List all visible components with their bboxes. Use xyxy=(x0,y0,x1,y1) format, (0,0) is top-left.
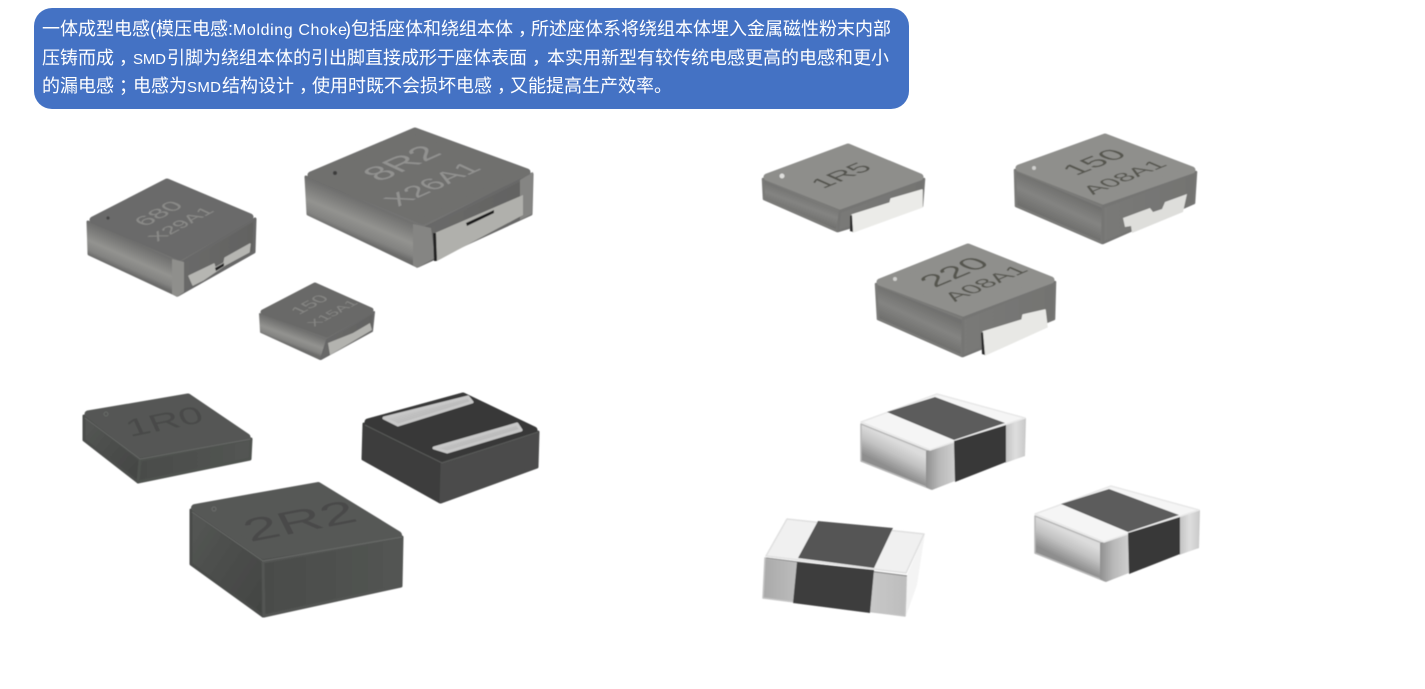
description text box xyxy=(34,8,909,109)
description text: 引脚为绕组本体的引出脚直接成形于座体表面 ， xyxy=(167,48,550,68)
inductor with two silver pads xyxy=(363,396,538,502)
inductor 150 X15A1: X15A1 xyxy=(304,298,362,328)
description text: Molding Choke xyxy=(233,22,347,39)
description text: 使用时既不会损坏电感 ， xyxy=(312,76,515,96)
panel: grey molded inductors, left xyxy=(88,131,533,359)
inductor 2R2: 2R2 xyxy=(236,494,363,549)
description text: 包括座体和绕组本体 ， xyxy=(351,19,536,39)
description text: 电感为 xyxy=(133,76,187,96)
panel: grey molded inductors, right xyxy=(763,137,1196,356)
inductor 220 A08A1: A08A1 xyxy=(938,263,1034,304)
inductor 8R2 X26A1: X26A1 xyxy=(377,159,489,210)
description text: 的漏电感 ； xyxy=(42,76,137,96)
description text: ) xyxy=(345,19,351,39)
description text: 所述座体系将绕组本体埋入金属磁性粉末内部 xyxy=(531,19,891,39)
inductor 150 A08A1: 150 xyxy=(1054,146,1134,178)
inductor 680 X29A1: X29A1 xyxy=(144,205,219,244)
inductor 1R5 xyxy=(763,147,924,232)
description text: 结构设计 ， xyxy=(222,76,317,96)
inductor 1R0: 1R0 xyxy=(121,402,208,442)
inductor 680 X29A1: 680 xyxy=(129,198,189,229)
description text: 压铸而成 ， xyxy=(42,48,137,68)
description text: SMD xyxy=(133,51,166,68)
inductor 150 X15A1 xyxy=(260,285,374,359)
inductor 150 A08A1 xyxy=(1015,137,1196,243)
description text xyxy=(42,19,891,96)
description text: 又能提高生产效率。 xyxy=(510,76,672,96)
band chip, top xyxy=(861,394,1026,490)
inductor 2R2 xyxy=(191,486,402,616)
silver pads xyxy=(384,397,521,452)
description text: 本实用新型有较传统电感更高的电感和更小 xyxy=(547,48,889,68)
inductor 8R2 X26A1 xyxy=(306,131,533,268)
inductor 220 A08A1 xyxy=(876,247,1055,356)
panel: dark molded inductors, left xyxy=(84,396,538,616)
inductor 1R5: 1R5 xyxy=(804,160,878,191)
panel: ceramic-band inductors, right xyxy=(763,394,1200,616)
description text: 一体成型电感(模压电感: xyxy=(42,19,233,39)
inductor 680 X29A1 xyxy=(88,182,255,297)
inductor 1R0 xyxy=(84,397,251,482)
description text: SMD xyxy=(187,79,221,96)
band chip, right xyxy=(1035,486,1200,582)
inductor 150 X15A1: 150 xyxy=(286,292,333,316)
band chip, lower left xyxy=(763,519,925,616)
inductor 150 A08A1: A08A1 xyxy=(1076,158,1173,197)
inductor 8R2 X26A1: 8R2 xyxy=(354,141,450,185)
inductor 220 A08A1: 220 xyxy=(911,254,998,291)
